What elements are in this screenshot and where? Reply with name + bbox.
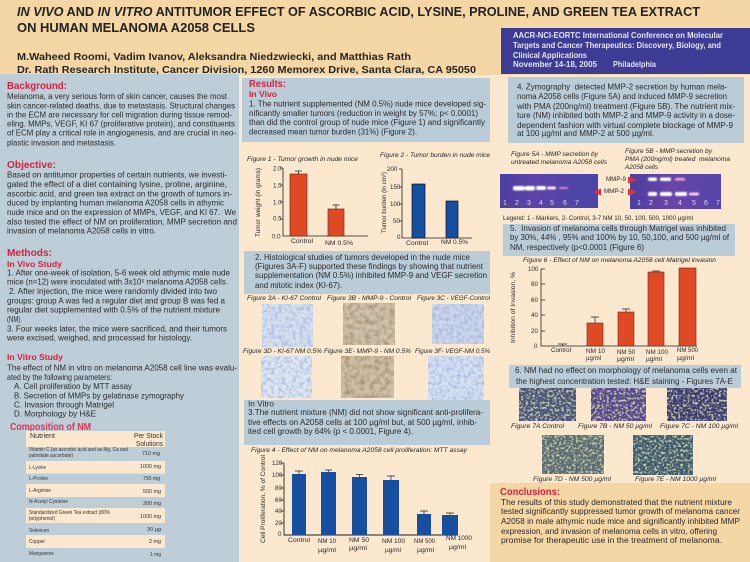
figure 3 histology images: Figure 3A - KI-67 Control [247,295,322,302]
methods section: In Vitro Study [7,352,63,362]
panel: in vitro text: 3.The nutrient mixture (NM) did not show significant anti-prolifera- [248,408,483,417]
composition table: N-Acetyl Cysteine [29,499,68,505]
composition table: Nutrient [30,431,55,440]
figure 3 histology images: Figure 3D - KI-67 NM 0.5% [243,348,322,355]
figure 7 micrographs [511,388,739,483]
composition table: Copper [29,539,45,545]
figure 3 histology images [243,295,491,400]
panel: in vitro text: ited cell growth by 64% (p < 0.0001, Figure 4). [248,427,413,436]
chart: figure 4 cell proliferation: µg/ml [385,547,401,554]
figure 5B gel: A2058 cells [624,164,659,171]
chart: figure 2 tumor burden: 50 [393,218,400,225]
panel: histological studies text: (Figures 3A-F) supported these findings by showing that nutrient [255,262,484,271]
conclusions panel background [490,483,750,562]
left column panel [0,74,239,562]
figure 5B gel: 6 [704,200,708,207]
conclusions: Conclusions: [500,486,560,498]
composition table: 1000 mg [140,464,161,470]
composition table: Selenium [29,528,49,534]
title: IN VIVO AND IN VITRO ANTITUMOR EFFECT OF ASCORBIC ACID, LYSINE, PROLINE, AND GREEN TEA EXTRACT [17,5,700,19]
chart: figure 6 invasion: µg/ml [586,355,601,362]
chart: figure 4 cell proliferation: 80 [275,485,282,492]
methods section: 1. After one-week of isolation, 5-6 week old athymic male nude [7,268,231,277]
chart: figure 6 invasion: µg/ml [646,356,662,363]
header band [0,0,750,75]
chart: figure 2 tumor burden: Figure 2 - Tumor burden in nude mice [380,152,490,159]
figure 5B gel: 4 [678,200,682,207]
methods section: 2. After injection, the mice were randomly divided into two [9,287,218,296]
conclusions [500,486,740,545]
chart: figure 4 cell proliferation: Figure 4 - Effect of NM on melanoma A2058 cell proliferation: MTT assay [251,447,468,454]
panel: histological studies text: supplementation (NM 0.5%) inhibited MMP-9 and VEGF secretion [255,271,487,280]
composition table: 1 mg [150,552,161,558]
objective section [7,159,237,236]
panel: in vitro text: In Vitro [248,400,275,408]
authors and affiliation: M.Waheed Roomi, Vadim Ivanov, Aleksandra Niedzwiecki, and Matthias Rath [17,52,411,63]
figure 5A gel [500,151,608,208]
chart: figure 6 invasion: 60 [531,297,538,304]
figure 5A gel: 7 [575,200,579,207]
chart: figure 6 invasion: NM 100 [646,349,669,356]
chart: figure 4 cell proliferation: µg/ml [417,547,434,554]
composition table: Standardized Green Tea extract (80% [29,510,110,516]
chart: figure 6 invasion [510,257,716,363]
methods section: B. Secretion of MMPs by gelatinase zymography [14,391,184,400]
MMP band labels and arrows: MMP-2 [604,188,625,195]
panel: invasion text: NM, respectively (p<0.0001 (Figure 6) [510,243,644,252]
panel: zymography text: with PMA (200ng/ml) treatment (Figure 5B). The nutrient mix- [516,102,735,111]
chart: figure 4 cell proliferation: 120 [272,460,283,467]
chart: figure 6 invasion: 80 [531,281,538,288]
chart: figure 6 invasion: Figure 6 - Effect of NM on melanoma A2058 cell Matrigel invasion [523,257,716,264]
chart: figure 1 tumor growth: Tumor weight (in grams) [255,168,262,237]
chart: figure 6 invasion: 20 [531,328,538,335]
conclusions: tested significantly suppressed tumor growth of melanoma cancer [501,507,740,516]
chart: figure 1 tumor growth: 1.5 [273,182,282,190]
chart: figure 2 tumor burden: 200 [387,166,398,173]
chart: figure 1 tumor growth [247,156,368,247]
chart: figure 6 invasion: 0 [534,343,538,350]
background section: Melanoma, a very serious form of skin cancer, causes the most [7,92,228,101]
panel: results in vivo: nificantly smaller tumors (reduction in weight by 57%; p< 0.0001) [249,109,478,118]
methods section: Methods: [7,247,52,259]
objective section: Objective: [7,159,56,171]
figure 5A gel: 1 [503,200,507,207]
objective section: gated the effect of a diet containing lysine, proline, arginine, [7,180,227,189]
chart: figure 4 cell proliferation: 100 [272,472,283,479]
panel: zymography text: noma A2058 cells (Figure 5A) and induced MMP-9 secretion [517,92,727,101]
chart: figure 2 tumor burden: 100 [390,201,401,208]
methods section: regular diet supplemented with 0.5% of the nutrient mixture [7,306,221,315]
methods section: In Vivo Study [7,259,62,269]
figure 7 micrographs: Figure 7A Control [511,423,565,430]
conclusions: The results of this study demonstrated that the nutrient mixture [501,498,733,507]
panel: results in vivo: 1. The nutrient supplemented (NM 0.5%) nude mice developed sig- [249,100,486,109]
chart: figure 6 invasion: NM 500 [677,347,699,354]
chart: figure 4 cell proliferation: µg/ml [318,547,336,554]
conclusions: promise for therapeutic use in the treatment of melanoma. [501,536,722,545]
composition table: L-Arginine [29,488,51,494]
chart: figure 2 tumor burden: 150 [390,184,401,191]
chart: figure 2 tumor burden [380,152,490,247]
figure 7 micrographs: Figure 7D - NM 500 µg/ml [533,476,612,483]
chart: figure 4 cell proliferation: µg/ml [449,544,466,551]
figure 5A gel: 4 [539,200,543,207]
methods section: A. Cell proliferation by MTT assay [14,382,132,391]
chart: figure 6 invasion: µg/ml [677,355,694,362]
panel: histological studies text: and mitotic index (KI-67). [255,281,342,290]
chart: figure 1 tumor growth: Control [291,238,313,245]
chart: figure 1 tumor growth: 1.0 [273,200,282,206]
objective section: duced by implanting human melanoma A2058 cells in athymic [7,199,224,208]
panel: results in vivo: In Vivo [249,89,277,99]
methods section: ated by the following parameters: [7,373,112,382]
methods section: D. Morphology by H&E [14,410,96,419]
composition table [26,431,165,558]
chart: figure 1 tumor growth: 0.5 [273,216,282,222]
figure 5B gel: 3 [664,200,668,207]
chart: figure 4 cell proliferation: NM 1000 [446,535,473,542]
panel: results in vivo: than did the control group of nude mice (Figure 1) and significantly [249,118,485,127]
panel: in vitro text: tive effects on A2058 cells at 100 µg/ml but, at 500 µg/ml, inhib- [248,418,477,427]
composition table: 30 µg [147,527,161,533]
chart: figure 4 cell proliferation: 60 [275,497,282,504]
panel: invasion text: by 30%, 44% , 95% and 100% by 10, 50,100, and 500 µg/ml of [510,233,730,242]
conference box: Philadelphia [613,59,656,69]
figure 5B gel: PMA (200ng/ml) treated melanoma [625,156,730,163]
composition table: palmitate ascorbate) [29,453,73,459]
gel legend: Legend: 1 - Markers, 2- Control, 3-7 NM 10, 50, 100, 500, 1000 µg/ml [503,215,693,222]
figure 5B gel [624,148,730,209]
background section: skin cancer-related deaths, due to metastasis. Structural changes [7,101,235,110]
panel: morphology text [509,365,741,388]
figure 5A gel: Figure 5A - MMP secretion by [511,151,599,158]
figure 3 histology images: Figure 3B - MMP-9 - Control [327,295,412,302]
authors and affiliation [17,52,476,76]
chart: figure 6 invasion: 40 [531,312,538,319]
composition table: 500 mg [143,489,161,495]
figure 5A gel: 3 [527,200,531,207]
figure 7 micrographs: Figure 7C - NM 100 µg/ml [660,423,739,430]
MMP band labels and arrows [593,176,637,196]
figure 5B gel: 2 [649,200,653,207]
methods section: The effect of NM in vitro on melanoma A2058 cell line was evalu- [7,364,237,373]
figure 5A gel: 5 [550,200,554,207]
panel: histological studies text: 2. Histological studies of tumors developed in the nude mice [255,253,471,262]
composition table: 710 mg [142,451,160,457]
panel: invasion text [503,224,735,256]
panel: results in vivo: decreased mean tumor burden (31%) (Figure 2). [249,128,417,137]
chart: figure 4 cell proliferation: 0 [278,531,282,538]
chart: figure 2 tumor burden: NM 0.5% [441,239,469,246]
background section: of ECM play a critical role in angiogenesis, and are crucial in neo- [7,129,236,138]
figure 3 histology images: Figure 3E- MMP-9 - NM 0.5% [324,348,411,355]
chart: figure 4 cell proliferation: NM 100 [382,538,406,545]
background section: eling. MMPs, VEGF, KI 67 (proliferative protein), and constituents [7,119,235,128]
panel: morphology text: 6. NM had no effect on morphology of melanoma cells even at [515,366,738,375]
chart: figure 4 cell proliferation [251,447,473,554]
composition table: Solutions [136,439,163,448]
figure 5A gel: 2 [515,200,519,207]
objective section: Based on antitumor properties of certain nutrients, we investi- [7,171,227,180]
objective section: also tested the effect of NM on proliferation, MMP secretion and [7,217,237,226]
chart: figure 4 cell proliferation: Control [288,537,310,544]
figure 5A gel: 6 [563,200,567,207]
methods section: C. Invasion through Matrigel [14,401,114,410]
background section: plastic invasion and metastasis. [7,139,116,148]
figure 5B gel: 1 [637,200,641,207]
composition table: Vitamin C (as ascorbic acid and as Mg, Ca and [29,447,128,453]
methods section: were excised, weighed, and processed for histology. [6,334,192,343]
title: ON HUMAN MELANOMA A2058 CELLS [17,21,255,35]
chart: figure 6 invasion: Inhibition of Invasion, % [510,271,517,343]
figure 3 histology images: Figure 3C - VEGF-Control [417,295,491,302]
chart: figure 1 tumor growth: Figure 1 - Tumor growth in nude mice [247,156,358,163]
chart: figure 6 invasion: Control [551,347,571,354]
chart: figure 1 tumor growth: 0.0 [272,234,281,240]
composition table: 750 mg [143,476,160,482]
figure 7 micrographs: Figure 7E - NM 1000 µg/ml [635,476,717,483]
conference box: AACR-NCI-EORTC International Conference on Molecular [513,30,724,40]
panel: zymography text: ture (NM) inhibited both MMP-2 and MMP-9 activity in a dose- [517,111,735,120]
chart: figure 6 invasion: NM 10 [586,348,606,355]
figure 5B gel: 5 [692,200,696,207]
chart: figure 4 cell proliferation: Cell Proliferation, % of Control [260,455,267,543]
chart: figure 2 tumor burden: Tumor burden (in cm³) [381,172,388,233]
figure 5B gel: Figure 5B - MMP secretion by [625,148,713,155]
composition table: polyphenol) [29,516,55,522]
MMP band labels and arrows: MMP-9 [606,176,627,183]
panel: zymography text: dependent fashion with virtual complete blockage of MMP-9 [517,121,734,130]
conference box: Clinical Applications [513,50,587,60]
chart: figure 6 invasion: µg/ml [617,356,634,363]
conclusions: expression, and invasion of melanoma cells in vitro, offering [501,527,717,536]
title [17,5,700,35]
methods section: 3. Four weeks later, the mice were sacrificed, and their tumors [7,324,227,333]
objective section: ascorbic acid, and green tea extract on the growth of tumors in- [7,189,232,198]
conference box [501,28,750,74]
panel: in vitro text [244,400,490,445]
chart: figure 4 cell proliferation: NM 50 [349,537,370,544]
panel: zymography text: 4. Zymography detected MMP-2 secretion by human mela- [517,82,727,91]
chart: figure 4 cell proliferation: NM 10 [318,538,337,545]
background section: in the ECM are necessary for cell migration during tissue remod- [7,111,232,120]
composition table: Per Stock [134,431,163,440]
chart: figure 1 tumor growth: 2.0 [273,166,282,172]
panel: invasion text: 5. Invasion of melanoma cells through Matrigel was inhibited [510,224,726,233]
chart: figure 6 invasion: 100 [528,266,539,273]
panel: zymography text [508,77,744,143]
objective section: nude mice and on the expression of MMPs, VEGF, and KI 67. We [7,208,237,217]
conference box: Targets and Cancer Therapeutics: Discovery, Biology, and [513,40,721,50]
panel: results in vivo [242,78,490,142]
composition table: 1000 mg [140,514,161,520]
chart: figure 1 tumor growth: NM 0.5% [325,240,354,247]
chart: figure 2 tumor burden: Control [406,240,428,247]
figure 5B gel: 7 [716,200,720,207]
methods section: (NM). [7,315,22,324]
chart: figure 4 cell proliferation: µg/ml [349,545,367,552]
chart: figure 4 cell proliferation: 40 [275,508,282,515]
composition table: L-Proline [29,476,48,482]
composition table: 2 mg [149,539,161,545]
methods section: mice (n=12) were inoculated with 3x10⁶ melanoma A2058 cells. [7,278,228,287]
methods section: groups: group A was fed a regular diet and group B was fed a [7,296,226,305]
composition table: Manganese [29,551,54,557]
figure 5A gel: untreated melanoma A2058 cells [511,159,608,166]
chart: figure 6 invasion: NM 50 [617,349,636,356]
chart: figure 4 cell proliferation: NM 500 [414,538,436,545]
conclusions: A2058 in male athymic nude mice and significantly inhibited MMP [501,517,740,526]
panel: results in vivo: Results: [249,78,286,90]
objective section: invasion of melanoma A2058 cells in vitro. [7,227,156,236]
panel: histological studies text [244,251,490,294]
panel: zymography text: at 100 µg/ml and MMP-2 at 500 µg/ml. [517,129,654,138]
composition table: 200 mg [143,501,161,507]
chart: figure 4 cell proliferation: 20 [275,520,282,527]
conference box: November 14-18, 2005 [513,59,597,69]
composition of NM heading: Composition of NM [10,421,91,433]
background section [7,80,236,148]
composition table: L-Lysine [29,465,46,471]
chart: figure 2 tumor burden: 0 [397,234,401,241]
background section: Background: [7,80,67,92]
panel: morphology text: the highest concentration tested: H&E staining - Figures 7A-E [516,377,733,386]
figure 7 micrographs: Figure 7B - NM 50 µg/ml [578,423,653,430]
methods section [6,247,237,419]
authors and affiliation: Dr. Rath Research Institute, Cancer Division, 1260 Memorex Drive, Santa Clara, CA 95050 [17,65,476,76]
figure 3 histology images: Figure 3F- VEGF-NM 0.5% [415,348,490,355]
